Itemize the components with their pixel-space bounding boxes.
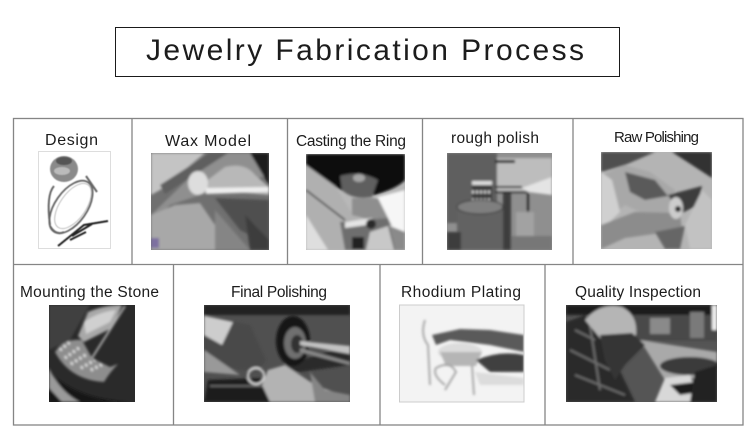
title [116,28,620,76]
image: carving wax model [151,153,269,250]
step: Final Polishing: Final Polishing [231,284,327,301]
step: rough polish: rough polish [451,130,539,147]
image: polishing machine [447,153,552,250]
step: Design [38,132,111,248]
step: Casting the Ring [296,133,406,250]
image: plating bath [400,305,524,402]
title: Jewelry Fabrication Process [146,34,584,67]
step: Mounting the Stone [20,284,159,402]
image: hand polishing ring [601,152,712,249]
step: Casting the Ring: Casting the Ring [296,133,406,150]
step: rough polish [447,130,552,250]
image: polishing wheel [204,305,350,402]
step: Wax Model: Wax Model [165,133,251,150]
step: Raw Polishing: Raw Polishing [614,129,699,146]
step: Rhodium Plating [400,284,524,402]
image: ring sketch [47,155,109,248]
step: Design: Design [45,132,98,149]
step: Quality Inspection: Quality Inspection [575,284,701,301]
process grid frame [13,118,743,425]
step: Mounting the Stone: Mounting the Stone [20,284,159,301]
image: casting worker [306,154,405,250]
step: Final Polishing [204,284,350,402]
step: Raw Polishing [601,129,712,249]
step: Rhodium Plating: Rhodium Plating [401,284,521,301]
step: Quality Inspection [566,284,720,402]
step: Wax Model [151,133,269,250]
image: inspector at bench [566,305,720,402]
image: setting stones [49,305,135,402]
